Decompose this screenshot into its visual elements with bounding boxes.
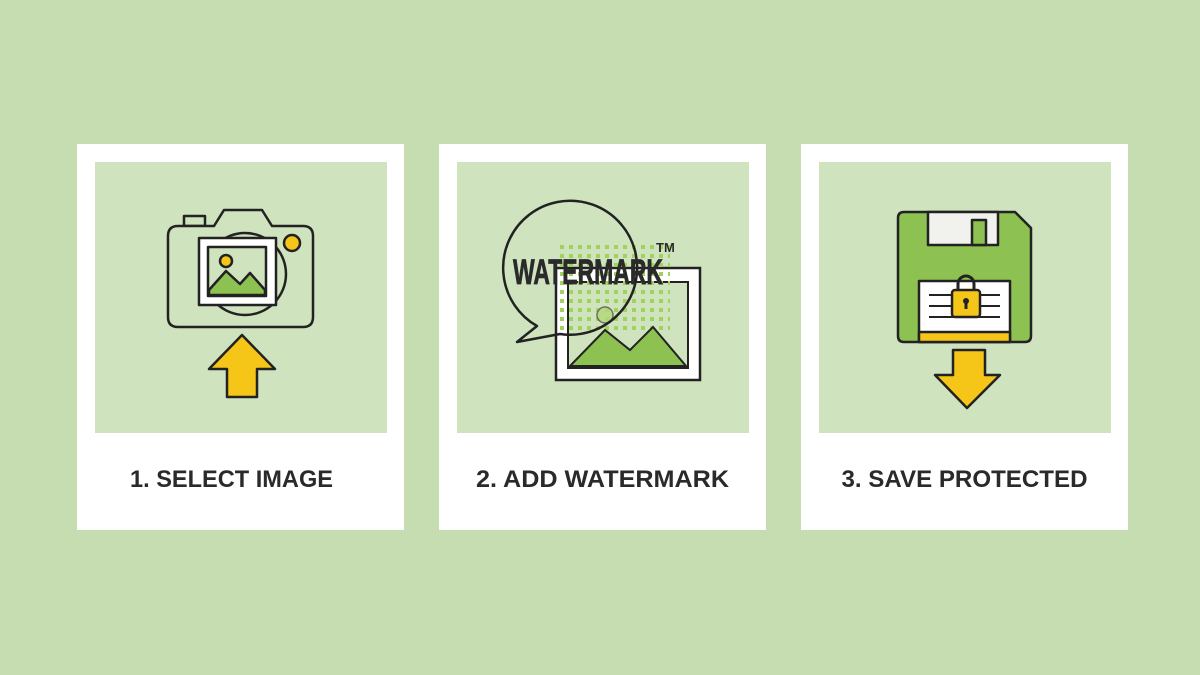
icon: camera: [168, 210, 313, 327]
icon: down arrow: [935, 350, 1000, 408]
icon: speech bubble: [503, 201, 637, 342]
card 3: save protected: [801, 144, 1128, 530]
label: step 2: 2. ADD WATERMARK: [476, 466, 730, 493]
text: watermark logo: WATERMARK: [513, 253, 663, 292]
icon: up arrow: [209, 335, 275, 397]
label: step 1: 1. SELECT IMAGE: [130, 466, 333, 493]
label: step 3: 3. SAVE PROTECTED: [842, 466, 1088, 493]
card 2: add watermark: [439, 144, 766, 530]
icon: floppy disk with lock: [898, 212, 1031, 342]
card 1: select image: [77, 144, 404, 530]
card 2: add watermark: TM: [656, 240, 675, 255]
icon: watermark photo frame: [556, 240, 700, 380]
